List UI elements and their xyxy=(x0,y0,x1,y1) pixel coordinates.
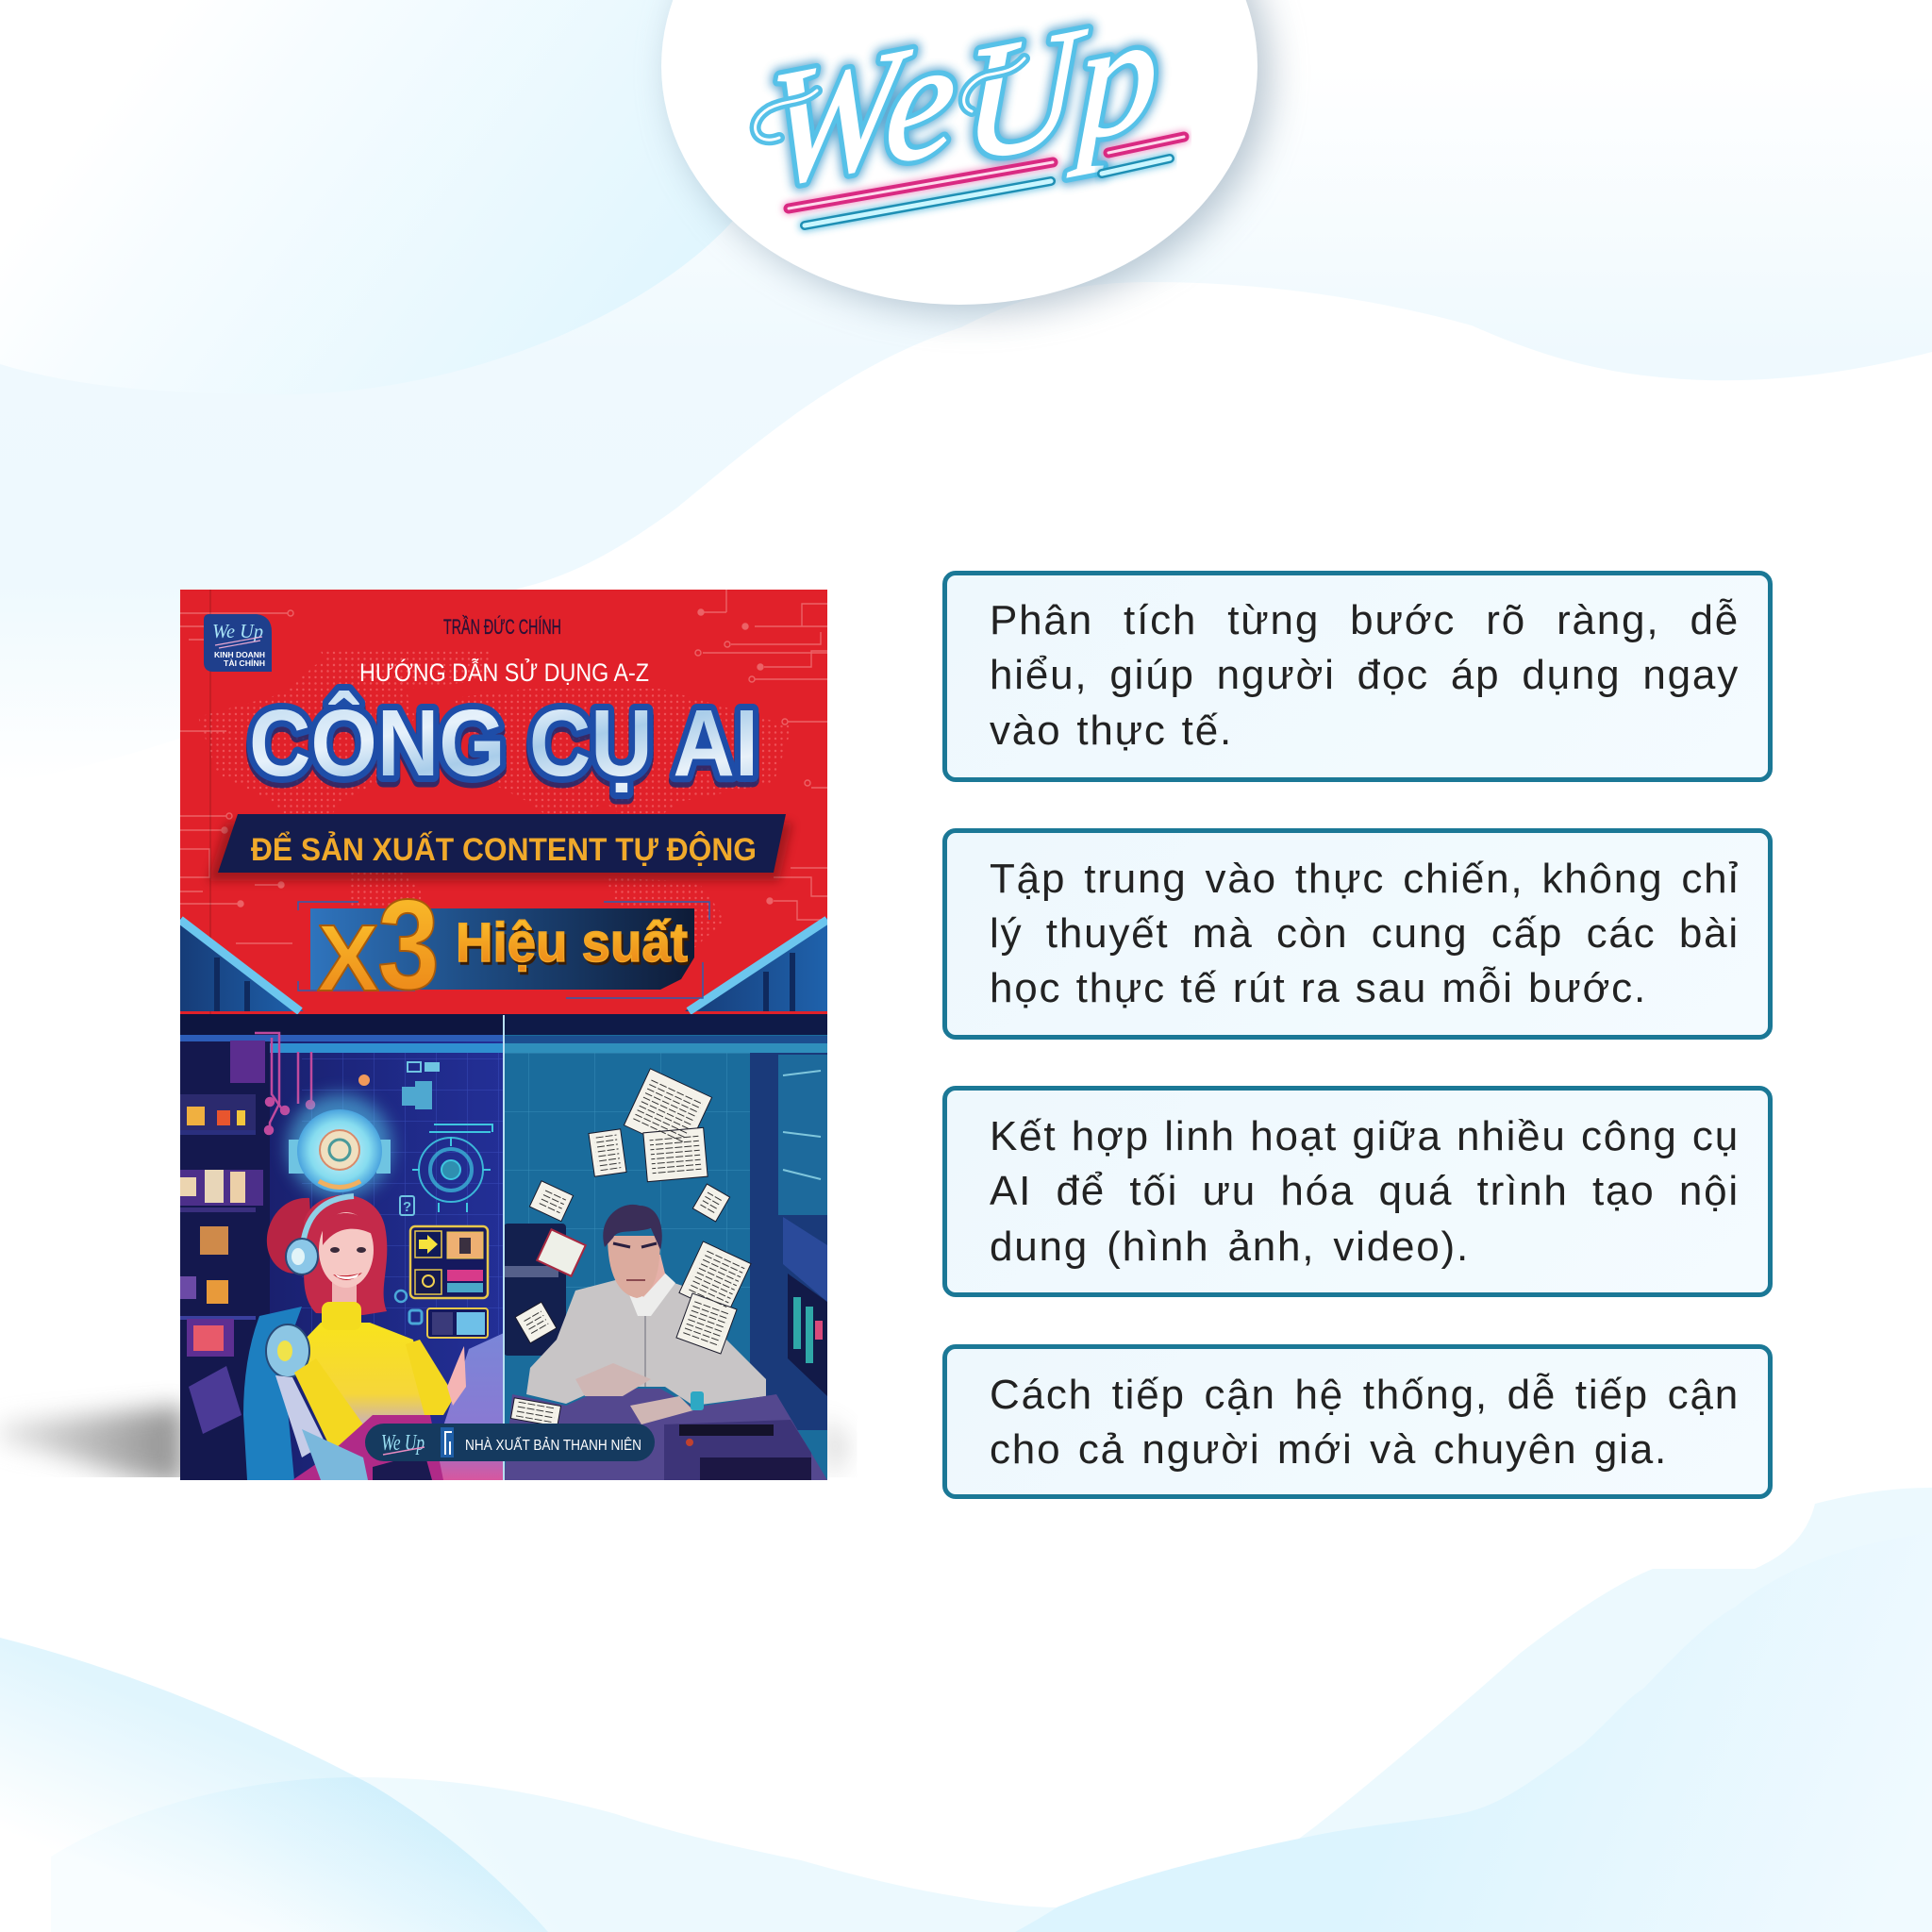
x3 performance box: Hiệu suất xyxy=(458,915,690,976)
white circle xyxy=(661,0,1257,305)
AI orb xyxy=(288,1094,391,1198)
x3 performance box xyxy=(298,873,709,1016)
main title: CÔNG CỤ AI xyxy=(249,691,758,796)
card 4 xyxy=(942,1344,1773,1499)
neon underline cyan xyxy=(805,158,1170,225)
card 2: Tập trung vào thực chiến, không chỉ xyxy=(990,856,1740,902)
dotted world map xyxy=(198,651,792,953)
floating docs xyxy=(358,1062,440,1109)
subtitle: HƯỚNG DẪN SỬ DỤNG A-Z xyxy=(359,657,649,687)
publisher badge: TÀI CHÍNH xyxy=(224,658,265,668)
question tag: ? xyxy=(403,1199,411,1215)
publisher badge: KINH DOANH xyxy=(214,650,265,659)
monitor xyxy=(504,1224,566,1356)
logo badge xyxy=(655,0,1291,334)
center divider xyxy=(503,1015,505,1480)
navy banner: ĐỂ SẢN XUẤT CONTENT TỰ ĐỘNG xyxy=(251,831,757,868)
neon underline pink xyxy=(789,137,1184,208)
card 4: cho cả người mới và chuyên gia. xyxy=(990,1426,1668,1473)
publisher pill: We Up xyxy=(381,1431,425,1456)
card 3: AI để tối ưu hóa quá trình tạo nội xyxy=(990,1168,1740,1214)
question tag xyxy=(400,1196,414,1215)
publisher badge xyxy=(204,614,272,672)
publisher badge: We Up xyxy=(212,620,263,642)
laptop xyxy=(425,1333,504,1480)
card 2: học thực tế rút ra sau mỗi bước. xyxy=(990,965,1647,1011)
x3 performance box: X xyxy=(317,906,379,1011)
card 3: dung (hình ảnh, video). xyxy=(990,1224,1470,1270)
desk machine xyxy=(664,1420,811,1480)
illustration right: manual workspace xyxy=(504,1014,827,1480)
woman xyxy=(266,1195,466,1480)
hands xyxy=(575,1363,693,1424)
shelves xyxy=(178,1041,270,1480)
card 3 xyxy=(942,1086,1773,1297)
decorative swashes xyxy=(756,58,1024,140)
x3 performance box: Hiệu suất xyxy=(456,912,688,974)
card 1: hiểu, giúp người đọc áp dụng ngay xyxy=(990,652,1740,698)
card 1: Phân tích từng bước rõ ràng, dễ xyxy=(990,597,1740,643)
illustration left: AI workspace xyxy=(178,1014,504,1480)
man xyxy=(526,1205,766,1406)
card 1: vào thực tế. xyxy=(990,708,1233,754)
logo wordmark xyxy=(765,0,1159,223)
publisher pill xyxy=(365,1424,655,1461)
desk xyxy=(504,1389,827,1480)
publisher pill: NHÀ XUẤT BẢN THANH NIÊN xyxy=(465,1436,641,1454)
circuit emblem xyxy=(412,1124,492,1212)
logo wordmark: We xyxy=(765,2,958,223)
floating papers xyxy=(510,1069,751,1426)
card 2 xyxy=(942,828,1773,1040)
main title: CÔNG CỤ AI xyxy=(249,691,758,796)
logo wordmark: We xyxy=(765,2,958,223)
book cover xyxy=(180,590,827,1480)
circle shadow xyxy=(674,0,1270,312)
blue corner left xyxy=(180,918,304,1011)
card 3: Kết hợp linh hoạt giữa nhiều công cụ xyxy=(990,1113,1740,1159)
x3 performance box: 3 xyxy=(377,873,440,1016)
pink circuit lines xyxy=(255,1033,314,1134)
chair xyxy=(243,1307,302,1480)
red cover top xyxy=(180,590,827,1019)
author name: TRẦN ĐỨC CHÍNH xyxy=(443,615,561,639)
UI panel xyxy=(410,1226,488,1298)
card 2: lý thuyết mà còn cung cấp các bài xyxy=(990,910,1740,957)
card 4: Cách tiếp cận hệ thống, dễ tiếp cận xyxy=(990,1372,1740,1418)
logo wordmark: We xyxy=(765,2,958,223)
main title: CÔNG CỤ AI xyxy=(249,695,758,801)
navy banner xyxy=(208,814,792,881)
circuit lines xyxy=(180,590,827,943)
card 1 xyxy=(942,571,1773,782)
small UI panel xyxy=(395,1291,488,1338)
spine fold xyxy=(209,590,211,1014)
blue corner right xyxy=(685,918,827,1011)
